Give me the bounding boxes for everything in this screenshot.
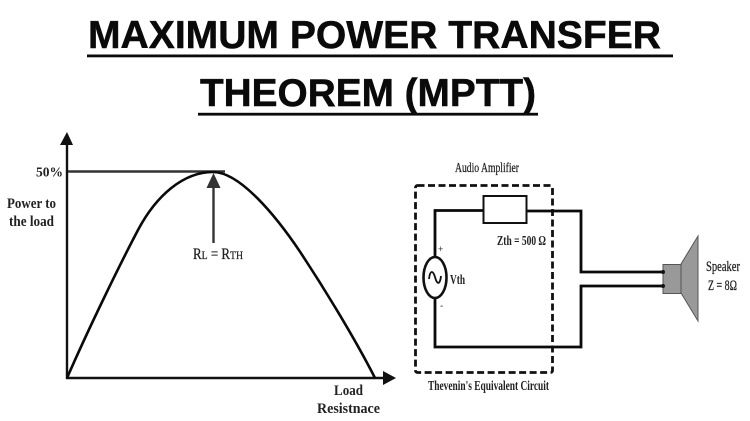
label: 50%: 50% bbox=[36, 166, 63, 180]
label: power to the load: the load bbox=[9, 214, 55, 230]
y axis with arrow bbox=[60, 132, 73, 379]
arrow to peak bbox=[206, 173, 220, 243]
label: RL = RTH: RL = RTH bbox=[193, 246, 243, 263]
polarity plus: + bbox=[438, 244, 443, 254]
label: power to the load bbox=[7, 196, 56, 230]
title: THEOREM (MPTT) bbox=[200, 72, 536, 115]
label: Zth: Zth = 500 Ω bbox=[497, 234, 546, 249]
resistor Zth bbox=[484, 196, 526, 223]
amplifier dashed boundary bbox=[416, 186, 552, 372]
title: MAXIMUM POWER TRANSFER bbox=[88, 14, 661, 57]
label: load resistance bbox=[317, 383, 380, 417]
polarity minus: - bbox=[440, 301, 443, 312]
panel: circuit diagram bbox=[416, 161, 740, 394]
circuit wires bbox=[435, 210, 663, 347]
label: load resistance: Resistnace bbox=[317, 401, 380, 417]
label: power to the load: Power to bbox=[7, 196, 56, 212]
label: speaker: Z = 8Ω bbox=[708, 278, 737, 294]
label: speaker bbox=[706, 259, 740, 294]
label: audio amplifier: Audio Amplifier bbox=[455, 161, 519, 176]
x axis with arrow bbox=[66, 371, 396, 385]
speaker bbox=[661, 236, 698, 321]
panel: power curve chart bbox=[7, 132, 396, 417]
label: thevenin equivalent: Thevenin's Equivalent Circuit bbox=[428, 379, 549, 394]
AC voltage source bbox=[424, 257, 446, 298]
power curve bbox=[67, 172, 375, 378]
50 percent reference line bbox=[68, 170, 225, 173]
title bbox=[87, 14, 673, 116]
label: load resistance: Load bbox=[334, 383, 364, 399]
label: Vth: Vth bbox=[450, 273, 465, 288]
